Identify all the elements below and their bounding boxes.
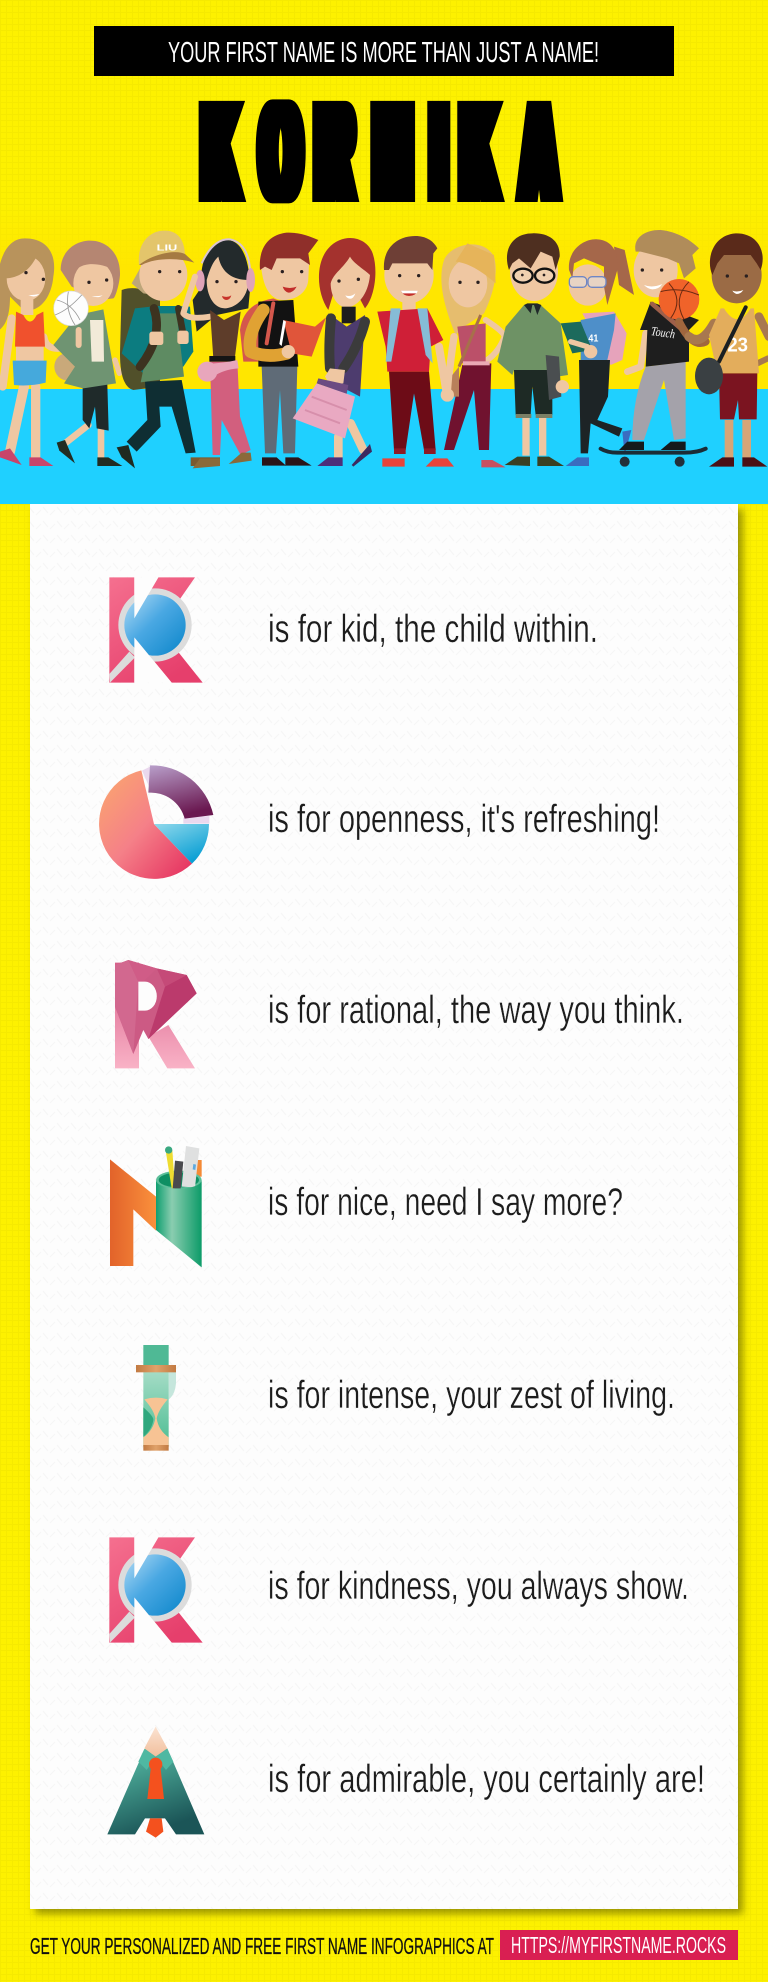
character: boy with book	[240, 233, 326, 466]
character: boy with backpack and cap: LIU	[157, 243, 177, 253]
character: girl with volleyball	[53, 241, 122, 466]
row 3: letter R	[115, 960, 684, 1068]
icon: K magnifier	[109, 1537, 203, 1643]
row 4: letter N	[110, 1146, 623, 1267]
character: girl with ponytail and tablet	[561, 239, 634, 466]
character: girl in orange top	[0, 238, 73, 466]
icon: O pie chart	[99, 765, 213, 879]
row 6: letter K	[109, 1537, 689, 1643]
row 1: letter K	[109, 577, 598, 683]
icon: A tie	[107, 1727, 204, 1838]
text: N meaning: is for nice, need I say more?	[268, 1181, 623, 1224]
character: boy in basketball jersey: 23	[727, 334, 748, 357]
character: girl with headphones	[183, 239, 255, 468]
header bar	[94, 26, 674, 76]
character: boy with backpack and cap	[117, 231, 220, 468]
title: KORNIKA	[203, 71, 557, 234]
character: boy on skateboard	[601, 230, 706, 467]
banner: group of young people	[0, 205, 768, 504]
icon: K magnifier	[109, 577, 203, 683]
character: girl with ponytail and tablet: 41	[588, 334, 599, 345]
panel: letter meanings	[30, 504, 738, 1909]
character: boy in basketball jersey	[689, 233, 768, 467]
text: K meaning: is for kid, the child within.	[268, 608, 598, 651]
row 2: letter O	[99, 765, 660, 879]
character: boy on skateboard: Touch	[650, 324, 676, 341]
character: boy in red shirt	[377, 236, 454, 467]
character: blond girl	[441, 243, 506, 467]
row 7: letter A	[107, 1727, 705, 1838]
icon: I hourglass	[136, 1345, 176, 1451]
character: boy with glasses	[497, 233, 569, 466]
row 5: letter I	[136, 1345, 675, 1451]
icon: N pencil cup	[110, 1146, 202, 1267]
icon: R gem	[115, 960, 197, 1068]
character: girl with pink bag	[293, 238, 375, 467]
